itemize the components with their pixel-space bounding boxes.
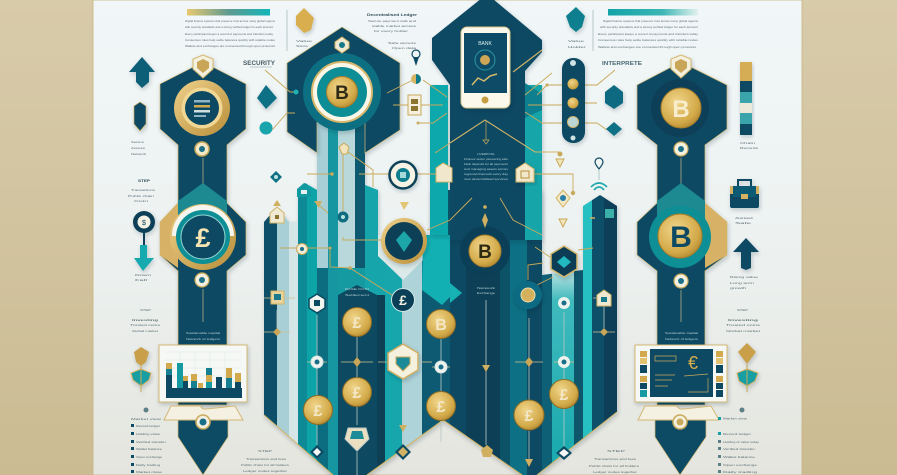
left list: Verified transfer [136, 440, 166, 444]
right list: Market view [723, 416, 748, 420]
bottom right caption: Ledger nodes together [593, 470, 637, 474]
right tower second hex: B [670, 221, 692, 254]
left small caption: Down [135, 273, 152, 277]
centre tower text: bank deposits for all payments [464, 162, 509, 166]
centre tower text: LIVERPOOL [477, 152, 495, 156]
left list: Wallet balance [136, 447, 162, 451]
right tower small node [674, 142, 688, 156]
divider [286, 10, 288, 51]
left list: Daily trading [136, 463, 160, 467]
left list: Market close [136, 470, 162, 474]
centre chevron outline [450, 120, 560, 152]
right tower [637, 55, 727, 405]
gold triangle right column [525, 459, 533, 467]
map pin [595, 158, 603, 180]
column captions: BASE COIN [345, 287, 369, 291]
centre captions: Network [477, 286, 496, 290]
left lower node [195, 273, 209, 287]
upper right marker [597, 290, 611, 306]
lower node 3 [435, 361, 447, 373]
right tower caption: Network of ledgers [665, 337, 699, 341]
pin above coin [482, 205, 488, 228]
left tower caption: Sustainable capital [186, 331, 220, 335]
left small caption: Fall [135, 278, 148, 282]
left small caption [135, 273, 152, 282]
right lower text: Investing [728, 318, 758, 322]
lower diamond mid [395, 444, 411, 460]
divider right [592, 10, 594, 51]
briefcase caption: Safe [735, 221, 752, 225]
lower node 1 [311, 356, 323, 368]
teal dot [260, 122, 272, 134]
left hex gem [134, 102, 146, 131]
right list: Wallet balance [723, 455, 756, 459]
small diamond right [606, 122, 622, 136]
lower striped column block [264, 100, 617, 475]
gold gem [296, 8, 314, 33]
phone: BANK [478, 41, 492, 47]
left pin [133, 211, 155, 248]
left pin: $ [142, 220, 146, 227]
right small diamond [600, 328, 608, 336]
right tower head coin [651, 79, 709, 137]
pentagon gem [345, 428, 369, 451]
lower node 4 [525, 357, 533, 367]
centre tower text: regional channels every day [464, 172, 509, 176]
teal gem right [605, 85, 623, 109]
wifi signal [591, 183, 607, 190]
left tower shield badge [193, 55, 213, 78]
left list: Open exchange [136, 455, 162, 459]
gold triangle left [314, 201, 322, 208]
house tag right [516, 163, 534, 182]
coin 5 [426, 392, 456, 420]
gem caption [296, 39, 313, 48]
top middle heading text: Open data [392, 46, 417, 50]
top middle heading text: Decentralised Ledger [367, 13, 418, 17]
right tower caption: Sustainable capital [665, 331, 698, 335]
lower diamond left [310, 445, 324, 459]
coin 2: £ [353, 385, 362, 402]
column captions: Settlement [345, 293, 369, 297]
top right gem caption: Holder [568, 45, 586, 49]
right list: Daily trading [723, 470, 758, 474]
house marker top of left column [270, 207, 284, 223]
left text 2: Transactions [131, 188, 156, 192]
left text: Secure [131, 140, 144, 144]
top right gradient bar [608, 9, 698, 16]
coin 6: £ [560, 387, 569, 404]
dark pill with nodes [562, 58, 585, 143]
gold square marker [271, 291, 284, 304]
left bottom arrow [178, 420, 228, 475]
centre coin [460, 226, 510, 276]
left tower head medallion [174, 80, 230, 136]
top right text [598, 19, 699, 49]
right arrow caption [730, 275, 759, 290]
column captions [345, 287, 369, 297]
right side swatch column [740, 62, 752, 135]
left tower second hex: £ [195, 223, 211, 253]
briefcase caption: Asset [735, 216, 753, 220]
lower diamond right [556, 446, 572, 460]
right list [718, 408, 760, 474]
centre captions: Exchange [477, 291, 495, 295]
right lower text: Trusted coins [726, 323, 761, 327]
right list: Open exchange [723, 463, 758, 467]
top right text: Every participant keeps a record of payments and transfers today [598, 32, 699, 36]
small node on left [296, 244, 308, 254]
hex shield node [388, 344, 418, 379]
top middle heading text: for every holder [374, 29, 408, 33]
top left text [185, 19, 276, 48]
briefcase caption [735, 216, 753, 225]
left text 2: Coin [134, 199, 149, 203]
node circle with gem [381, 218, 427, 264]
lower gold gem [481, 445, 493, 457]
coin 7: £ [525, 408, 534, 425]
top middle heading text [367, 13, 418, 50]
gold triangle under chevron [556, 159, 564, 167]
right tower second hex [649, 183, 727, 268]
arched dark column [338, 285, 377, 475]
top middle heading text: Secure payment rails and [368, 19, 416, 23]
gem caption: Value [296, 39, 313, 43]
right arrow caption: growth [730, 286, 747, 290]
bottom right caption [589, 449, 640, 474]
bottom left caption [241, 449, 290, 473]
right bottom arrow [655, 420, 706, 475]
swatch caption: Records [740, 146, 759, 150]
top right gem caption: Value [568, 39, 585, 43]
left text 3: Investing [132, 318, 158, 322]
gold triangle top of left column [273, 200, 281, 206]
lower node 2 [353, 357, 361, 367]
bottom left caption: Public chain for all holders [241, 463, 290, 467]
phone [461, 27, 510, 108]
diamond pin right [556, 190, 570, 207]
right lower node [674, 274, 688, 288]
left list: Market view [131, 417, 163, 421]
security heading: SECURITY [243, 61, 275, 67]
left teal down arrow [134, 245, 154, 271]
right list: Record ledger [723, 432, 751, 436]
top left text: Digital finance systems that preserve trust across many global regions [185, 19, 275, 23]
gold triangle under pin [559, 219, 567, 227]
left text: Network [131, 152, 147, 156]
right list: Verified transfer [723, 447, 755, 451]
right tower head coin: B [672, 96, 690, 123]
right lower text: Global market [726, 329, 760, 333]
right arrow caption: Long term [730, 281, 755, 285]
small label box [408, 95, 421, 115]
bottom right caption: STEP [607, 449, 625, 453]
dark pound node: £ [399, 292, 407, 308]
coin 1: £ [353, 315, 362, 332]
hexagon head with bitcoin: B [335, 83, 349, 104]
top right text: with security standards and a strong verified ledger for each account [600, 25, 698, 29]
briefcase [730, 180, 759, 208]
left text [131, 140, 147, 156]
right tower shield badge [671, 55, 691, 78]
bottom left caption: Ledger nodes together [243, 469, 287, 473]
column hex marker [309, 294, 325, 313]
dark pound node [392, 288, 414, 312]
centre tower small marker [483, 121, 489, 144]
thin vertical guide lines [264, 285, 615, 475]
swatch caption [740, 141, 759, 150]
top right text: Digital finance systems that preserve trust across many global regions [603, 19, 699, 23]
coin 3: £ [314, 403, 323, 420]
right arrow caption: Rising value [730, 275, 759, 279]
right dashboard board: € [688, 353, 698, 373]
connector dots [328, 84, 575, 270]
centre tower text [464, 152, 509, 181]
right dashboard board [635, 345, 727, 402]
left leaf icons [131, 347, 151, 392]
left tower [160, 55, 246, 405]
bottom left caption: Transactions and fees [246, 457, 287, 461]
interpret heading: INTERPRETE [602, 61, 642, 67]
top right text: Wallets and exchanges are connected through open protocols [598, 45, 697, 49]
right tower caption [665, 331, 699, 341]
gold triangle lower left [399, 425, 407, 432]
centre tower text: and managing assets across [464, 167, 509, 171]
right list: Holding of value today [723, 440, 760, 444]
left list: Holding value [136, 432, 160, 436]
top middle heading text: Safe access [388, 41, 417, 45]
top right gem caption [568, 39, 586, 49]
small diamond left [273, 328, 281, 336]
coin 2 [342, 378, 372, 406]
lower node 5 [558, 356, 570, 368]
hexagon head with bitcoin [287, 27, 400, 153]
gold hem of block [264, 412, 617, 475]
top left text: Wallets and exchanges are connected through open protocols [185, 44, 276, 48]
house marker teal [297, 183, 311, 197]
hex top badge [335, 37, 349, 53]
gem caption: Store [296, 44, 309, 48]
small diamond node [339, 143, 349, 154]
coin 3 [304, 396, 332, 424]
coin 1 [342, 308, 372, 336]
lower node 6 [558, 297, 570, 309]
left text 2: Public chain [128, 194, 155, 198]
top left text: Every participant keeps a record of payments and transfers today [185, 32, 273, 36]
centre tower text: new decentralised services [464, 177, 509, 181]
left text 3: STEP [140, 308, 151, 312]
left text 3: Global market [132, 329, 158, 333]
left list: Record ledger [136, 424, 160, 428]
coin 4: B [435, 317, 447, 334]
small teal node [338, 212, 348, 222]
centre captions [477, 286, 496, 295]
ring node [390, 162, 416, 188]
teal join dot [294, 90, 298, 94]
right open book [638, 406, 719, 429]
swatch caption: Chain [740, 141, 756, 145]
teal right chevron [422, 235, 450, 305]
coin 7 [514, 400, 544, 430]
bottom right caption: Public chain for all holders [589, 464, 640, 468]
right lower text [726, 308, 761, 333]
teal triangle marker [450, 283, 462, 303]
paper panel [93, 0, 802, 475]
left text 2: STEP [138, 179, 151, 183]
centre tower text: Finance sector pioneering safe [464, 157, 508, 161]
top left gradient bar [187, 9, 270, 16]
hexagon chip [551, 246, 577, 277]
left list [131, 408, 166, 474]
right lower text: STEP [737, 308, 748, 312]
left tower second hex [160, 183, 236, 270]
left gem [257, 85, 277, 109]
gold triangle mid [400, 202, 409, 210]
left up arrow [129, 57, 155, 88]
top middle heading text: stable market access [372, 24, 417, 28]
central tower [430, 0, 542, 240]
bottom right caption: Transactions and fees [594, 457, 637, 461]
left text 2 [128, 179, 156, 203]
top right text: Consensus rules help settle balances quickly with reliable nodes [598, 38, 699, 42]
top left text: Consensus rules help settle balances quickly with reliable nodes [185, 38, 276, 42]
ring node right [514, 281, 542, 309]
left diamond pin [270, 171, 282, 183]
bottom left caption: STEP [258, 449, 272, 453]
left open book [164, 406, 243, 429]
left text 3 [130, 308, 161, 333]
gold node [411, 74, 421, 84]
coin 4 [426, 310, 456, 338]
coin 5: £ [437, 399, 446, 416]
left tower caption [186, 331, 221, 341]
teal gem top right [566, 7, 585, 32]
top left text: with security standards and a strong verified ledger for each account [185, 25, 273, 29]
gold triangle mid column [482, 365, 490, 372]
map pin left [412, 50, 420, 66]
connector network [265, 70, 615, 295]
house tag left [436, 163, 452, 182]
left bar chart board [159, 345, 247, 402]
pale chevron [378, 235, 427, 280]
right leaf icons [737, 343, 758, 392]
small teal box on right column [590, 209, 614, 218]
left tower small node [195, 142, 209, 156]
coin 6 [550, 380, 578, 408]
centre coin: B [478, 242, 492, 263]
right up arrow [733, 238, 759, 270]
left tower caption: Network of ledgers [186, 337, 221, 341]
left text 3: Trusted coins [130, 323, 161, 327]
left text: Access [131, 146, 146, 150]
